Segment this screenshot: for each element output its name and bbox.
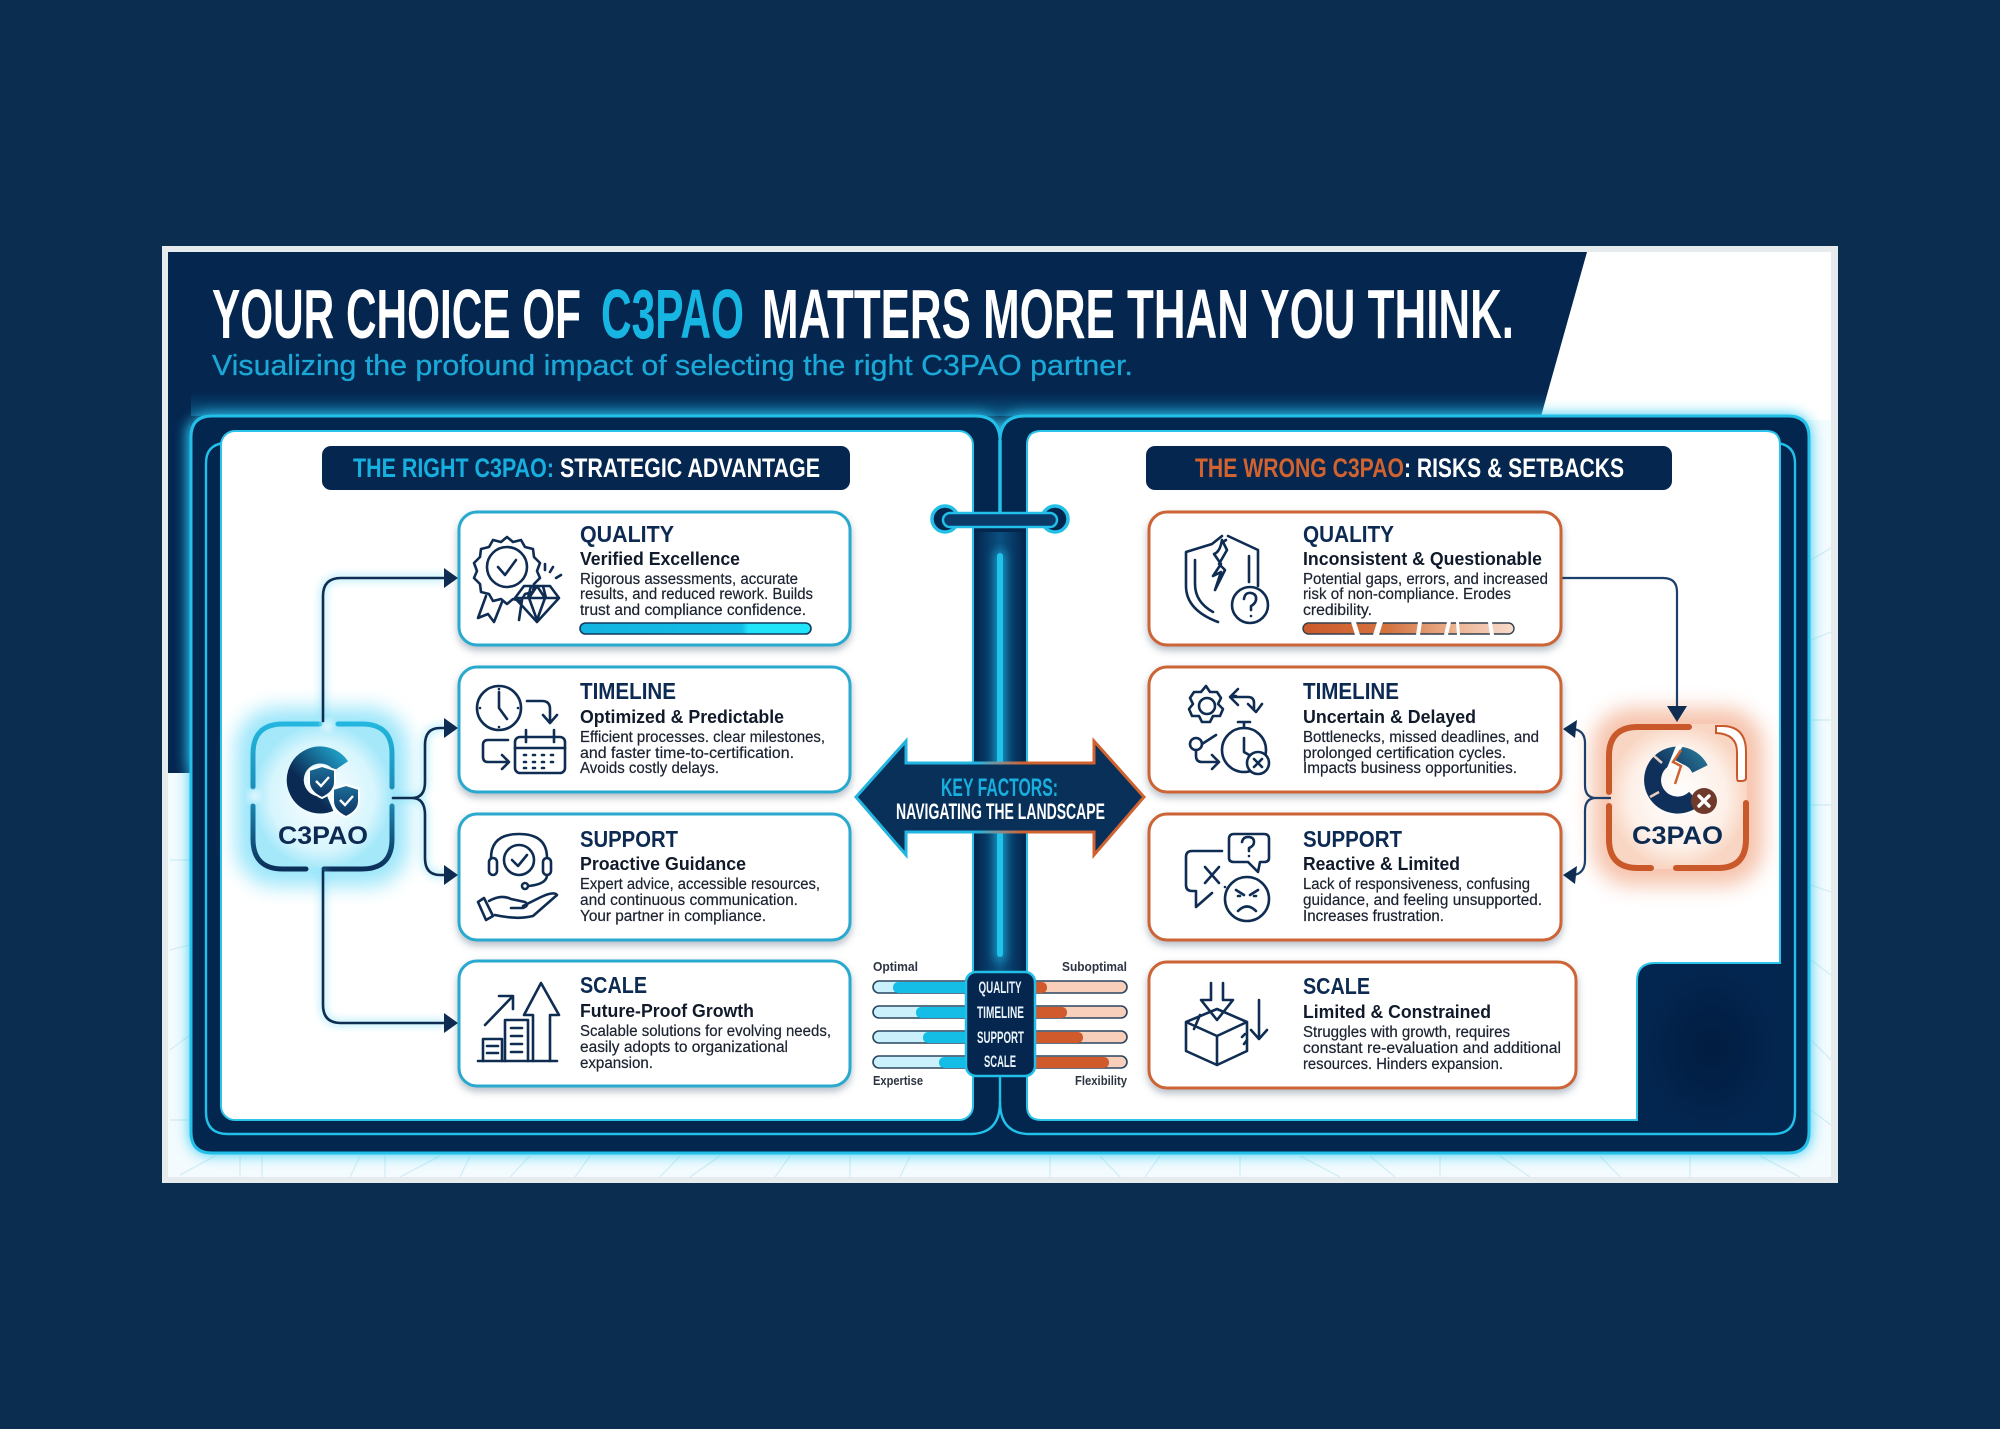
panel: the right C3PAO xyxy=(221,431,973,1120)
chart centre labels: SCALE xyxy=(984,1052,1016,1071)
card: support right: and continuous communication. xyxy=(580,892,798,909)
comparison chart: right bars xyxy=(1027,960,1127,1088)
card: quality wrong xyxy=(1149,512,1561,645)
icon: speech bubbles and angry face xyxy=(1186,834,1269,921)
icon: box with down arrows xyxy=(1186,983,1267,1065)
banner: wrong C3PAO: THE WRONG C3PAO xyxy=(1195,453,1404,483)
broken progress bar xyxy=(1303,622,1514,635)
card: support right: Your partner in compliance. xyxy=(580,908,766,925)
card: quality right: Verified Excellence xyxy=(580,548,740,569)
icon: cracked shield with question mark xyxy=(1186,536,1268,623)
card: support right: Proactive Guidance xyxy=(580,853,746,874)
card: scale right: expansion. xyxy=(580,1055,653,1072)
card: scale right: easily adopts to organizational xyxy=(580,1039,788,1056)
banner: right C3PAO xyxy=(322,446,850,490)
card: quality wrong: risk of non-compliance. Erodes xyxy=(1303,586,1511,603)
card: support wrong: guidance, and feeling unsupported. xyxy=(1303,892,1542,909)
icon: C3PAO shield logo xyxy=(295,755,359,817)
card: scale right xyxy=(459,961,850,1086)
comparison chart: right bars: Suboptimal xyxy=(1062,960,1127,974)
card: quality right: results, and reduced rework. Builds xyxy=(580,586,813,603)
infographic canvas xyxy=(162,246,1838,1183)
chart centre labels: QUALITY xyxy=(978,978,1022,997)
card: timeline wrong xyxy=(1149,667,1561,792)
card: scale wrong: SCALE xyxy=(1303,973,1370,999)
icon: gear and stopwatch xyxy=(1189,686,1269,774)
card: quality right: trust and compliance confidence. xyxy=(580,602,806,619)
card: scale wrong: Struggles with growth, requires xyxy=(1303,1024,1510,1041)
card: scale right: Scalable solutions for evolving needs, xyxy=(580,1023,831,1040)
connectors: left hub to cards xyxy=(323,568,458,1033)
comparison chart: left bars xyxy=(873,960,973,1088)
comparison chart: left bars: Expertise xyxy=(873,1074,923,1088)
card: scale wrong: constant re-evaluation and additional xyxy=(1303,1040,1561,1057)
progress bar xyxy=(580,623,811,634)
top connector clasp xyxy=(932,506,1068,532)
chart centre labels: TIMELINE xyxy=(977,1003,1024,1022)
card: quality wrong: Potential gaps, errors, and increased xyxy=(1303,571,1548,588)
card: timeline right: Efficient processes. clear milestones, xyxy=(580,729,825,746)
title xyxy=(212,275,1514,353)
card: quality right xyxy=(459,512,850,645)
key factors double arrow: KEY FACTORS: xyxy=(941,774,1058,802)
card: support wrong: SUPPORT xyxy=(1303,826,1402,852)
card: scale right: Future-Proof Growth xyxy=(580,1000,754,1021)
header band xyxy=(168,252,1587,773)
card: timeline right: TIMELINE xyxy=(580,678,676,704)
C3PAO hub: wrong choice xyxy=(1592,708,1764,886)
icon: broken C3PAO logo xyxy=(1650,744,1717,814)
subtitle: Visualizing the profound impact of selecting the right C3PAO partner. xyxy=(212,350,1133,382)
card: scale wrong xyxy=(1149,962,1576,1088)
title: C3PAO xyxy=(601,275,744,353)
chart centre labels xyxy=(966,972,1035,1076)
title: MATTERS MORE THAN YOU THINK. xyxy=(762,275,1514,353)
card: timeline right: Avoids costly delays. xyxy=(580,760,719,777)
banner: wrong C3PAO: : RISKS & SETBACKS xyxy=(1404,453,1624,483)
connectors: wrong cards to hub xyxy=(1562,578,1687,884)
card: quality wrong: QUALITY xyxy=(1303,521,1394,547)
C3PAO hub: right choice xyxy=(236,708,408,886)
comparison chart: left bars: Optimal xyxy=(873,960,918,974)
card: scale right: SCALE xyxy=(580,972,647,998)
card: timeline wrong: prolonged certification cycles. xyxy=(1303,745,1506,762)
banner: wrong C3PAO xyxy=(1146,446,1672,490)
central spine xyxy=(975,532,1025,972)
C3PAO hub: wrong choice: C3PAO xyxy=(1632,822,1723,850)
key factors double arrow xyxy=(856,741,1144,855)
card: support right: Expert advice, accessible resources, xyxy=(580,876,820,893)
card: support right: SUPPORT xyxy=(580,826,678,852)
C3PAO hub: right choice: C3PAO xyxy=(278,822,368,850)
title: YOUR CHOICE OF xyxy=(212,275,581,353)
outer frame xyxy=(162,246,1838,1183)
card: quality right: QUALITY xyxy=(580,521,674,547)
card: quality wrong: credibility. xyxy=(1303,602,1372,619)
card: timeline wrong: Impacts business opportunities. xyxy=(1303,760,1517,777)
card: support wrong: Increases frustration. xyxy=(1303,908,1444,925)
icon: clock and calendar xyxy=(477,686,565,773)
icon: growth bars and arrow xyxy=(478,983,559,1061)
panel shell xyxy=(191,416,1809,1153)
icon: rosette and diamond xyxy=(474,537,561,622)
card: timeline wrong: TIMELINE xyxy=(1303,678,1399,704)
card: timeline right: Optimized & Predictable xyxy=(580,706,784,727)
banner: right C3PAO: STRATEGIC ADVANTAGE xyxy=(560,453,820,483)
comparison chart: right bars: Flexibility xyxy=(1075,1074,1127,1088)
card: support right xyxy=(459,814,850,940)
card: scale wrong: resources. Hinders expansion. xyxy=(1303,1056,1503,1073)
card: timeline right: and faster time-to-certification. xyxy=(580,745,794,762)
card: timeline wrong: Bottlenecks, missed deadlines, and xyxy=(1303,729,1539,746)
card: quality wrong: Inconsistent & Questionable xyxy=(1303,548,1542,569)
card: quality right: Rigorous assessments, accurate xyxy=(580,571,798,588)
icon: headset and hand xyxy=(478,834,557,920)
card: scale wrong: Limited & Constrained xyxy=(1303,1001,1491,1022)
panel: the wrong C3PAO xyxy=(1027,431,1782,1131)
card: support wrong: Lack of responsiveness, confusing xyxy=(1303,876,1530,893)
key factors double arrow: NAVIGATING THE LANDSCAPE xyxy=(896,799,1105,824)
card: timeline right xyxy=(459,667,850,792)
chart centre labels: SUPPORT xyxy=(977,1028,1024,1047)
card: support wrong: Reactive & Limited xyxy=(1303,853,1460,874)
card: timeline wrong: Uncertain & Delayed xyxy=(1303,706,1476,727)
banner: right C3PAO: THE RIGHT C3PAO: xyxy=(353,453,554,483)
card: support wrong xyxy=(1149,814,1561,940)
